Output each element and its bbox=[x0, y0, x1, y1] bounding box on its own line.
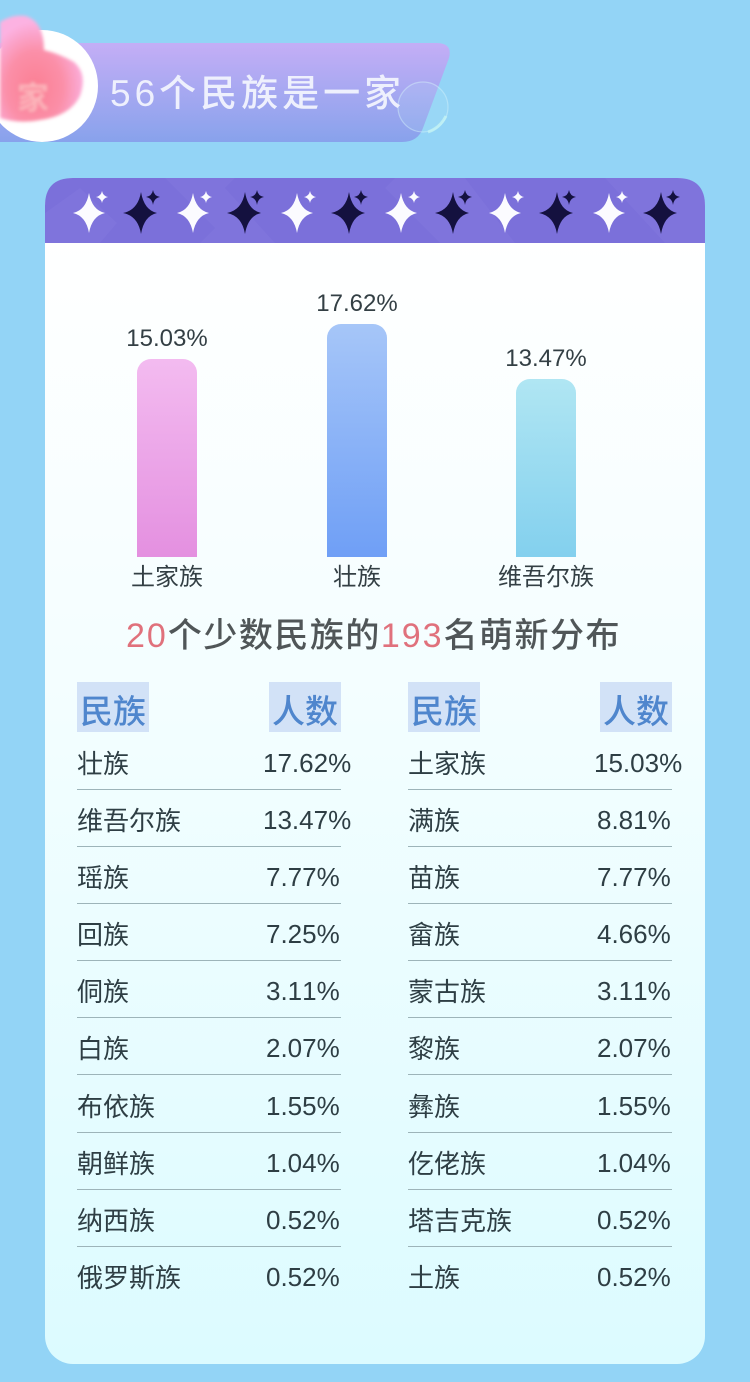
table: right column: 15.03% bbox=[594, 748, 682, 778]
table: left column: 13.47% bbox=[263, 805, 351, 835]
table title: 20个少数民族的193名萌新分布 bbox=[126, 617, 621, 655]
table: right column: 黎族 bbox=[408, 1029, 460, 1066]
table: left column bbox=[77, 744, 351, 1295]
column header: 民族 left: 民族 bbox=[80, 685, 146, 733]
table: right column: 满族 bbox=[408, 801, 460, 838]
table: left column: 回族 bbox=[77, 915, 129, 952]
table: right column: 0.52% bbox=[597, 1205, 671, 1235]
table: right column: 8.81% bbox=[597, 805, 671, 835]
banner: ribbon with heart badge bbox=[0, 14, 450, 142]
table: left column: 0.52% bbox=[266, 1205, 340, 1235]
table: right column: 1.04% bbox=[597, 1148, 671, 1178]
table: right column: 7.77% bbox=[597, 862, 671, 892]
table: left column: 壮族 bbox=[77, 744, 129, 781]
table: left column: 0.52% bbox=[266, 1262, 340, 1292]
column header: 人数 right: 人数 bbox=[603, 685, 669, 733]
table: left column: 俄罗斯族 bbox=[77, 1258, 181, 1295]
bar chart bbox=[126, 290, 594, 592]
bar label: 土家族 value: 15.03% bbox=[126, 325, 208, 352]
table: right column: 3.11% bbox=[597, 976, 671, 1006]
bar label: 维吾尔族 value: 13.47% bbox=[505, 345, 587, 372]
table: right column: 畲族 bbox=[408, 915, 460, 952]
table: right column: 2.07% bbox=[597, 1033, 671, 1063]
table: left column: 纳西族 bbox=[77, 1201, 155, 1238]
table: right column: 土家族 bbox=[408, 744, 486, 781]
table: left column: 朝鲜族 bbox=[77, 1144, 155, 1181]
table: left column: 侗族 bbox=[77, 972, 129, 1009]
table: right column: 彝族 bbox=[408, 1087, 460, 1124]
table: left column: 17.62% bbox=[263, 748, 351, 778]
banner title: 56个民族是一家 bbox=[110, 73, 405, 114]
table: left column: 瑶族 bbox=[77, 858, 129, 895]
bar: 维吾尔族 bbox=[516, 379, 576, 557]
table: right column: 仡佬族 bbox=[408, 1144, 486, 1181]
table: right column: 1.55% bbox=[597, 1091, 671, 1121]
card header with sparkles bbox=[45, 178, 705, 243]
table: right column: 蒙古族 bbox=[408, 972, 486, 1009]
bar: 壮族 bbox=[327, 324, 387, 557]
table: right column: 0.52% bbox=[597, 1262, 671, 1292]
table: right column: 土族 bbox=[408, 1258, 460, 1295]
table: right column: 4.66% bbox=[597, 919, 671, 949]
column header: 人数 left: 人数 bbox=[272, 685, 338, 733]
bar name: 壮族: 壮族 bbox=[333, 557, 381, 592]
table: left column: 1.04% bbox=[266, 1148, 340, 1178]
table: right column bbox=[408, 744, 682, 1295]
column header: 民族 right: 民族 bbox=[411, 685, 477, 733]
bar name: 土家族: 土家族 bbox=[131, 557, 203, 592]
table: right column: 苗族 bbox=[408, 858, 460, 895]
table: left column: 2.07% bbox=[266, 1033, 340, 1063]
bar name: 维吾尔族: 维吾尔族 bbox=[498, 557, 594, 592]
table: left column: 维吾尔族 bbox=[77, 801, 181, 838]
table: left column: 7.77% bbox=[266, 862, 340, 892]
table: left column: 7.25% bbox=[266, 919, 340, 949]
table: left column: 3.11% bbox=[266, 976, 340, 1006]
table: left column: 布依族 bbox=[77, 1087, 155, 1124]
main card bbox=[45, 178, 705, 1364]
heart badge character: 家 bbox=[17, 73, 49, 119]
table: left column: 白族 bbox=[77, 1029, 129, 1066]
table: right column: 塔吉克族 bbox=[408, 1201, 512, 1238]
bar: 土家族 bbox=[137, 359, 197, 557]
bar label: 壮族 value: 17.62% bbox=[316, 290, 398, 317]
table: left column: 1.55% bbox=[266, 1091, 340, 1121]
